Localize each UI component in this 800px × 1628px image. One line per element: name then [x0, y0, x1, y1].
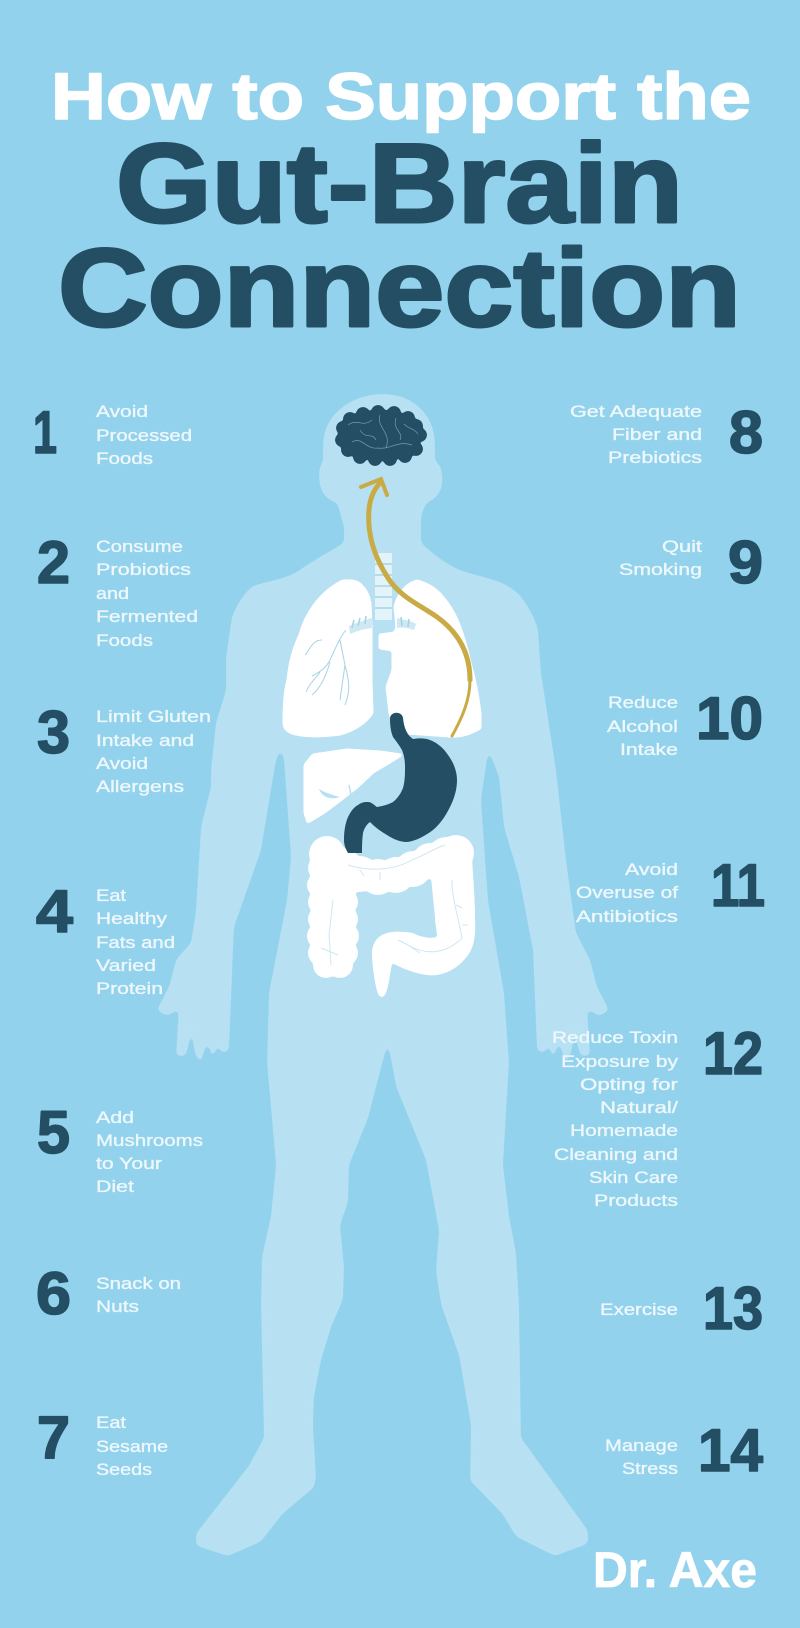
tip 8 — [570, 399, 763, 467]
tip 2: Fermented — [96, 607, 198, 626]
tip 7: Seeds — [96, 1460, 152, 1479]
icon: brain — [335, 405, 427, 466]
tip 10 — [607, 685, 763, 759]
title — [51, 59, 751, 350]
tip 12: Products — [594, 1191, 678, 1210]
gold arrow from gut to brain — [361, 479, 470, 736]
tip 12: 12 — [703, 1020, 763, 1087]
tip 8: Get Adequate — [570, 402, 702, 421]
tip 6: Snack on — [96, 1274, 181, 1293]
tip 5: Mushrooms — [96, 1131, 203, 1150]
lungs and heart — [284, 581, 480, 736]
tip 12: Reduce Toxin — [552, 1028, 678, 1047]
tip 2: Foods — [96, 631, 153, 650]
tip 4: Fats and — [96, 933, 175, 952]
tip 11: Overuse of — [576, 883, 678, 902]
trachea and bronchi — [305, 553, 416, 705]
tip 5: to Your — [96, 1154, 162, 1173]
title: Gut-Brain — [116, 121, 683, 246]
title: How to Support the — [51, 59, 751, 133]
tip 11: Avoid — [625, 860, 678, 879]
tip 14: 14 — [698, 1417, 764, 1484]
tip 9: Quit — [662, 537, 702, 556]
tip 7: Sesame — [96, 1437, 168, 1456]
tip 6: Nuts — [96, 1297, 139, 1316]
logo: Dr. Axe: Dr. Axe — [593, 1542, 757, 1598]
tip 8: Fiber and — [612, 425, 702, 444]
tip 5 — [37, 1099, 203, 1196]
tip 11: 11 — [711, 852, 765, 919]
tip 14 — [605, 1417, 764, 1484]
tip 7: 7 — [37, 1404, 70, 1471]
liver — [305, 750, 401, 822]
tip 5: Diet — [96, 1177, 134, 1196]
tip 6: 6 — [36, 1260, 71, 1327]
human body silhouette — [158, 395, 608, 1555]
tip 1: Avoid — [96, 402, 148, 421]
tip 10: Reduce — [608, 693, 678, 712]
large intestine — [307, 835, 475, 997]
tip 3: 3 — [37, 699, 70, 766]
tip 1: Processed — [96, 426, 192, 445]
tip 2 — [37, 529, 198, 650]
tip 13 — [600, 1275, 763, 1342]
tip 3: Limit Gluten — [96, 707, 211, 726]
tip 14: Stress — [622, 1459, 678, 1478]
tip 8: Prebiotics — [608, 448, 702, 467]
tip 10: Alcohol — [607, 717, 678, 736]
tip 12: Cleaning and — [554, 1145, 678, 1164]
tip 2: and — [96, 584, 129, 603]
tip 14: Manage — [605, 1436, 678, 1455]
tip 12: Opting for — [580, 1075, 678, 1094]
tip 12: Homemade — [570, 1121, 678, 1140]
tip 2: 2 — [37, 529, 70, 596]
tip 13: 13 — [703, 1275, 763, 1342]
tip 10: Intake — [620, 740, 678, 759]
tip 9: 9 — [728, 529, 763, 596]
tip 3: Allergens — [96, 777, 184, 796]
tip 11: Antibiotics — [576, 907, 678, 926]
tip 7 — [37, 1404, 168, 1479]
tip 6 — [36, 1260, 181, 1327]
tip 1 — [33, 399, 192, 468]
tip 12: Natural/ — [600, 1098, 678, 1117]
tip 4: Varied — [96, 956, 156, 975]
tip 5: 5 — [37, 1099, 70, 1166]
tip 9: Smoking — [619, 560, 702, 579]
tip 1: 1 — [33, 399, 57, 466]
tip 13: Exercise — [600, 1300, 678, 1319]
tip 8: 8 — [729, 399, 763, 466]
tip 10: 10 — [696, 685, 763, 752]
tip 12: Skin Care — [589, 1168, 678, 1187]
tip 3: Avoid — [96, 754, 148, 773]
tip 12: Exposure by — [561, 1052, 679, 1071]
tip 3 — [37, 699, 211, 796]
tip 12 — [552, 1020, 763, 1210]
tip 4: Eat — [96, 886, 126, 905]
tip 4: Protein — [96, 979, 163, 998]
stomach — [344, 713, 457, 853]
tip 4: 4 — [36, 878, 74, 945]
tip 4 — [36, 878, 175, 998]
tip 5: Add — [96, 1108, 134, 1127]
tip 11 — [576, 852, 765, 926]
tip 4: Healthy — [96, 909, 168, 928]
tip 9 — [619, 529, 763, 596]
tip 2: Consume — [96, 537, 183, 556]
tip 7: Eat — [96, 1413, 126, 1432]
tip 3: Intake and — [96, 731, 194, 750]
title: Connection — [58, 227, 741, 350]
tip 1: Foods — [96, 449, 153, 468]
tip 2: Probiotics — [96, 560, 191, 579]
